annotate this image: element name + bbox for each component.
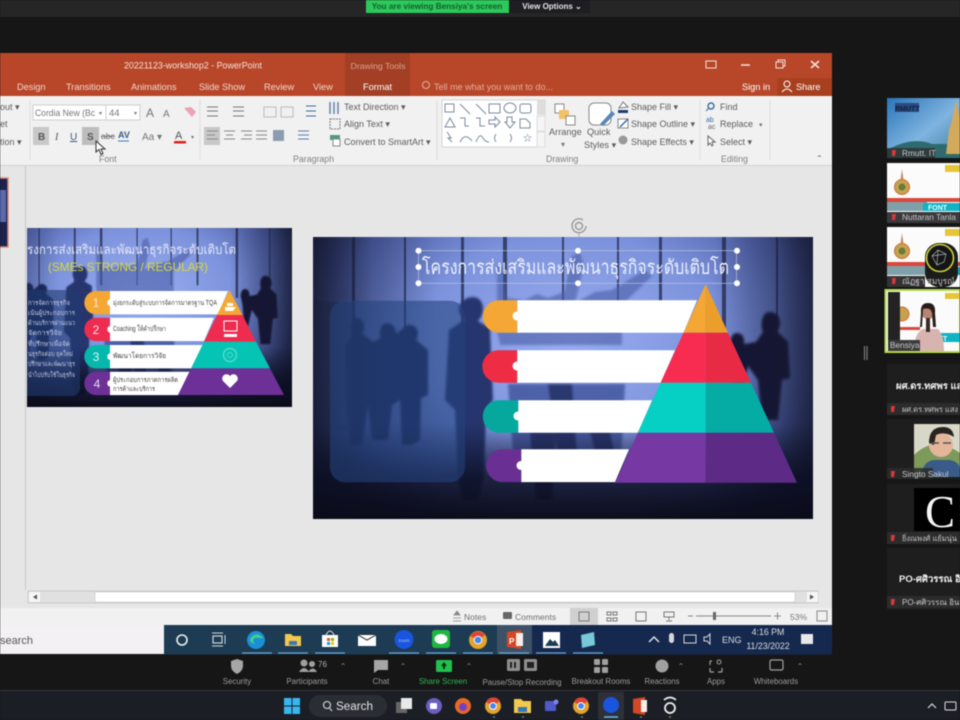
drawing group: Styles ▾	[584, 140, 617, 150]
font group: 44	[109, 108, 120, 119]
strip 1: 1	[93, 296, 100, 310]
participant: PO-Sasiwan	[887, 548, 960, 610]
editing group: ⌃	[816, 154, 823, 163]
main slide	[313, 237, 813, 519]
participants: 76	[318, 660, 327, 669]
PowerPoint title bar: 20221123-workshop2 - PowerPoint	[124, 60, 262, 72]
strip 4	[486, 449, 629, 482]
drawing group: ▾	[561, 140, 565, 149]
participant: Tosporn	[887, 364, 960, 415]
rotate handle	[572, 219, 586, 238]
speaker	[914, 303, 944, 351]
app icons: zoom	[398, 638, 410, 643]
participant: Nuttaran	[887, 163, 960, 223]
search pill	[309, 695, 387, 717]
ribbon: et	[0, 119, 8, 129]
security	[223, 659, 251, 686]
ribbon tabs: Sign in	[742, 82, 770, 92]
editing group: ab	[706, 117, 714, 124]
editing group: ▾	[759, 122, 763, 129]
small pyramid	[178, 290, 284, 395]
selected title placeholder	[416, 219, 740, 286]
paragraph group: Text Direction ▾	[344, 102, 406, 112]
participant: Tosporn: ผศ.ดร.ทศพร แสง	[902, 405, 958, 414]
font group: Cordia New (Bc	[35, 108, 95, 119]
small slide	[0, 228, 292, 407]
status bar: Comments	[515, 612, 556, 622]
side description: นำไปปรับใช้ในธุรกิจ	[28, 371, 75, 379]
font group: ▾	[99, 111, 102, 117]
selection handles	[416, 248, 740, 286]
editing group: ac	[708, 124, 716, 131]
security: Security	[223, 677, 251, 686]
participant: Rmutt IT: RMUTT	[895, 106, 920, 113]
font group: B	[38, 132, 45, 143]
window controls	[706, 60, 819, 68]
ribbon tabs: Review	[264, 82, 294, 92]
PowerPoint title bar: Drawing Tools	[350, 61, 406, 71]
drawing group: Shape Effects ▾	[631, 137, 694, 147]
ribbon tabs: Format	[363, 82, 393, 92]
side description: ที่ปรึกษาเพื่อจัด	[28, 339, 70, 348]
participant: Yinnapong: ยิ่งณพงศ์ แย้มนุ่น	[901, 533, 957, 543]
strip 3	[483, 400, 652, 433]
reactions: Reactions	[644, 677, 680, 686]
paragraph group: Align Text ▾	[344, 119, 390, 129]
breakout rooms: Breakout Rooms	[572, 677, 630, 686]
PowerPoint title bar	[0, 53, 832, 96]
paragraph group	[204, 102, 431, 164]
slide thumbnail	[0, 178, 8, 247]
strip 3: 3	[93, 350, 100, 364]
ribbon tabs: Transitions	[66, 82, 111, 92]
pause stop recording	[483, 659, 561, 687]
ribbon tabs: Share	[796, 82, 821, 92]
reactions: ⌃	[678, 662, 684, 671]
side description: จัดการวิจัย	[28, 329, 62, 337]
ribbon	[0, 96, 832, 166]
windows 10 taskbar: search	[0, 635, 33, 647]
format cursor	[96, 141, 105, 154]
status bar: 53%	[790, 612, 807, 622]
search pill: Search	[336, 701, 373, 713]
system tray: 11/23/2022	[746, 641, 790, 651]
drawing group: Arrange	[549, 127, 582, 137]
strip 2	[84, 318, 214, 341]
reactions	[644, 660, 684, 686]
strip 2: Coaching ให้คำปรึกษา	[113, 324, 166, 333]
participants	[286, 660, 346, 686]
chat: ⌃	[400, 662, 406, 671]
status bar: Notes	[464, 612, 486, 622]
strip 1	[483, 300, 697, 333]
font group: abc	[101, 131, 115, 141]
font group: ▾	[134, 111, 137, 117]
strip 3: พัฒนาโดยการวิจัย	[113, 351, 166, 360]
slide title: รงการส่งเสริมและพัฒนาธุรกิจระดับเติบโต	[27, 242, 236, 258]
editing group: Select ▾	[720, 137, 753, 147]
whiteboards: Whiteboards	[754, 677, 798, 686]
ribbon tabs: Design	[17, 82, 46, 92]
participant: Singto Sakul: Singto Sakul	[902, 469, 949, 479]
windows 10 taskbar	[0, 625, 832, 654]
system tray: ENG	[722, 635, 742, 645]
participant: Rmutt IT	[887, 98, 960, 158]
font group: ▾	[191, 135, 194, 141]
font group: Font	[99, 154, 117, 164]
zoom meeting controls	[223, 659, 803, 687]
seal	[894, 169, 910, 194]
strip 1: มุ่งยกระดับสู่ระบบการจัดการมาตรฐาน TQA	[113, 299, 217, 307]
participants: Participants	[286, 677, 328, 686]
participant: Bensiya (active speaker)	[886, 290, 960, 352]
strip 3	[84, 345, 203, 368]
font group: AV	[118, 130, 130, 140]
strip 2: 2	[93, 323, 100, 337]
system tray	[649, 627, 813, 651]
pyramid icons	[222, 303, 238, 388]
ribbon: out ▾	[0, 102, 20, 112]
taskbar apps	[396, 692, 676, 720]
ribbon tabs: View	[313, 82, 333, 92]
drawing group	[442, 100, 696, 164]
side description: นธุรกิจต่อบ ยุคใหม่	[28, 350, 73, 358]
font group: S	[87, 132, 94, 143]
horizontal scrollbar	[0, 590, 832, 608]
drawing group: ☆	[523, 133, 532, 143]
participants: ⌃	[340, 662, 346, 671]
strip 4: 4	[94, 377, 101, 391]
strip 1	[84, 291, 228, 314]
editing group	[706, 102, 823, 164]
editing group: Replace	[720, 119, 753, 129]
font group: Aa ▾	[142, 132, 162, 143]
chat	[373, 660, 406, 686]
strip 4	[84, 372, 190, 395]
status bar	[0, 608, 832, 625]
running indicators	[242, 652, 603, 654]
paragraph group: Paragraph	[293, 154, 334, 164]
share screen: Share Screen	[419, 677, 467, 686]
side panel	[20, 290, 80, 396]
seal	[894, 233, 910, 258]
share screen: ⌃	[466, 662, 472, 671]
participant: Bensiya (active speaker): Bensiya	[890, 340, 920, 350]
font group: A	[163, 109, 170, 120]
font group: U	[70, 132, 77, 143]
participant: Yinnapong	[887, 484, 960, 544]
tray	[928, 704, 936, 708]
strip 4: ผู้ประกอบการภาคการผลิต	[113, 376, 178, 384]
ribbon tabs: Animations	[131, 82, 177, 92]
start button	[284, 698, 300, 714]
drawing group: Drawing	[546, 154, 578, 164]
side description: ด้านบริการผ่านแนว	[28, 319, 75, 327]
zoom viewing banner: You are viewing Bensiya's screen	[372, 2, 502, 11]
ribbon tabs	[17, 81, 821, 93]
chat: Chat	[373, 677, 390, 686]
drawing group: Shape Fill ▾	[631, 102, 679, 112]
ribbon: tion ▾	[0, 137, 22, 147]
zoom viewing banner: View Options ⌄	[522, 2, 582, 11]
participant: Nattha: ณัฏฐา สมบูรณ์	[902, 276, 955, 287]
side description: เน้นผู้ประกอบการ	[28, 309, 75, 317]
share screen	[419, 660, 472, 686]
drawing group: Quick	[587, 127, 611, 137]
font group	[33, 105, 196, 164]
zoom viewing banner	[366, 0, 590, 13]
drawing group: Shape Outline ▾	[631, 119, 696, 129]
ribbon tabs: Slide Show	[199, 82, 245, 92]
side description: ปรึกษาและพัฒนาธุร	[28, 360, 75, 368]
apps	[707, 660, 725, 686]
windows 11 taskbar	[0, 690, 960, 720]
whiteboards: ⌃	[797, 662, 803, 671]
app icons: P	[509, 637, 515, 646]
system tray: 4:16 PM	[752, 627, 784, 637]
left text panel	[330, 301, 465, 482]
participant: Singto Sakul	[887, 419, 960, 479]
side description	[28, 299, 75, 379]
paragraph group: Convert to SmartArt ▾	[344, 137, 431, 147]
app icons	[247, 630, 595, 649]
strip 4: การค้าและบริการ	[113, 385, 155, 393]
strip 2	[482, 350, 675, 383]
slide title: โครงการส่งเสริมและพัฒนาธุรกิจระดับเติบโต	[422, 256, 729, 280]
slide editing area	[0, 166, 832, 590]
gallery resize handle	[864, 346, 867, 360]
participant: Nattha	[887, 227, 960, 287]
pause stop recording: Pause/Stop Recording	[483, 678, 561, 687]
breakout rooms	[572, 659, 630, 686]
font group: A	[175, 130, 183, 142]
font group: I	[54, 132, 59, 143]
font group: A	[146, 106, 154, 120]
ribbon tabs: Tell me what you want to do...	[434, 82, 553, 93]
editing group: Editing	[721, 154, 748, 164]
participant: Nuttaran: Nuttaran Tanla	[902, 212, 956, 222]
apps: Apps	[707, 677, 725, 686]
side description: การจัดการธุรกิจ	[28, 299, 70, 307]
avatar	[925, 243, 958, 287]
pyramid	[615, 284, 797, 483]
slide subtitle: (SMEs STRONG / REGULAR)	[48, 260, 208, 274]
participant: Yinnapong: C	[925, 487, 955, 537]
whiteboards	[754, 660, 803, 686]
participant: Rmutt IT: Rmutt. IT	[902, 148, 936, 158]
editing group: Find	[720, 102, 738, 112]
participant: Bensiya (active speaker): NT	[938, 336, 948, 343]
participant: Nuttaran: FONT	[928, 205, 948, 212]
